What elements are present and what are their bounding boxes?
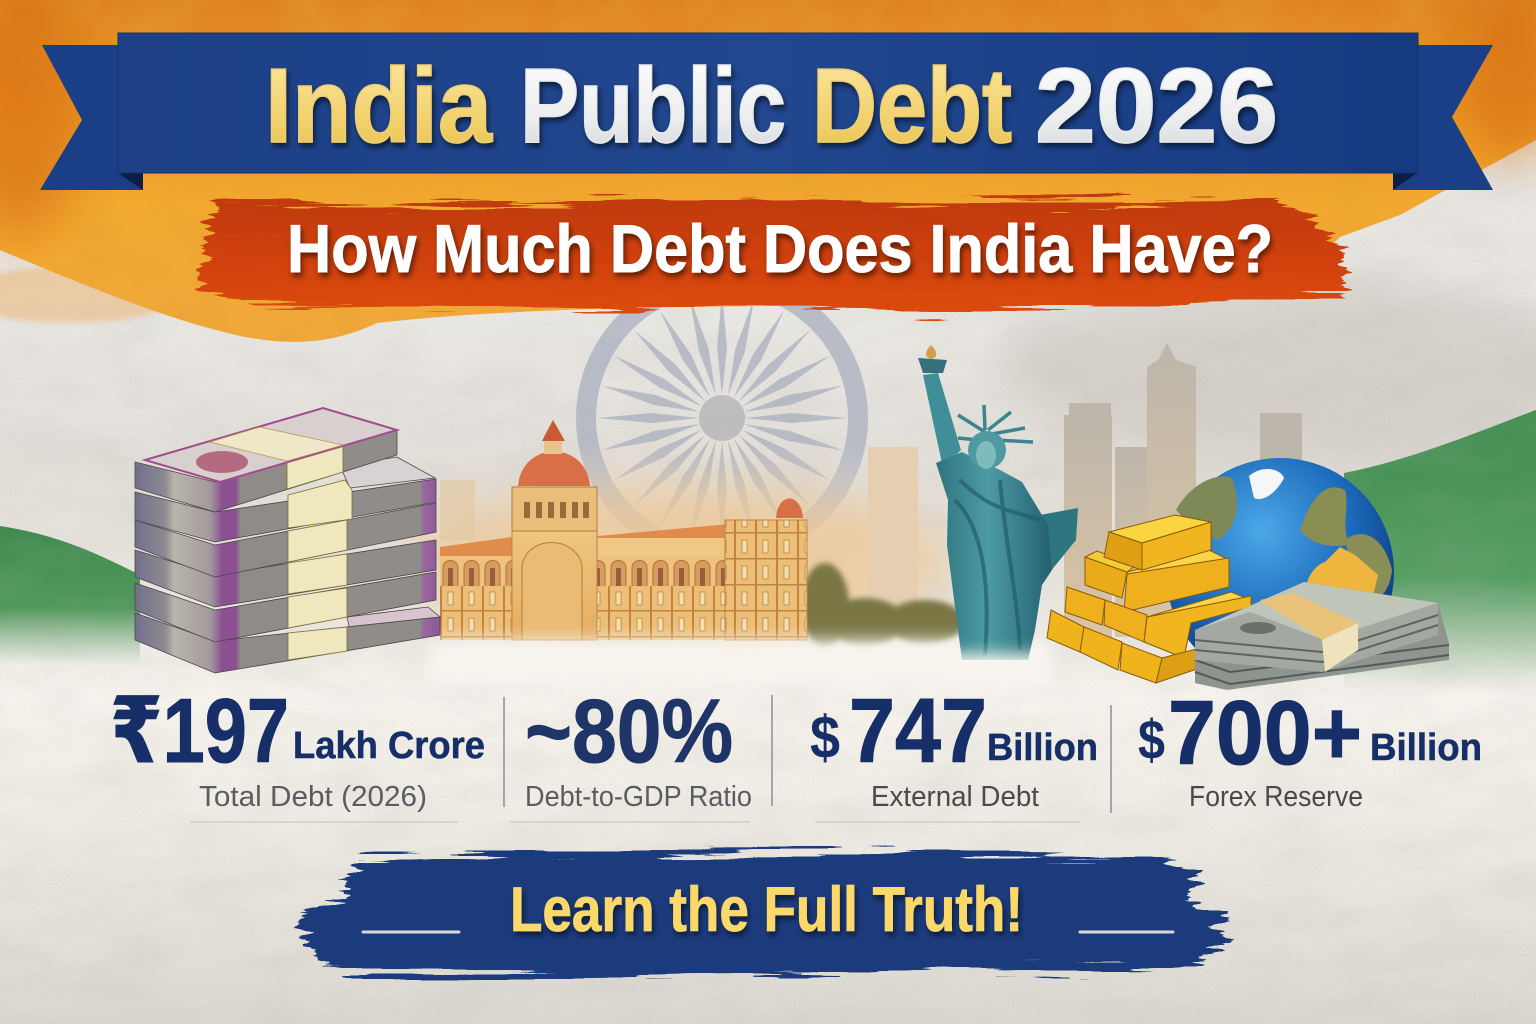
stat dividers <box>504 695 1111 813</box>
hotel central tower <box>512 530 597 640</box>
illustration: rupee note stacks <box>135 408 440 673</box>
rupee bundle 2 top note <box>340 457 435 488</box>
hotel upper window band <box>597 538 727 556</box>
stat: total debt <box>110 681 485 813</box>
illustration: dollar bundles <box>1195 547 1449 690</box>
background: green flag band left <box>0 526 140 670</box>
title: 2026 <box>1035 47 1278 165</box>
rupee bundle 4 band <box>288 554 347 594</box>
stat: external debt: External Debt <box>871 781 1039 813</box>
statue flame <box>926 345 936 359</box>
gold bar bottom end one <box>1047 610 1084 652</box>
statue robe <box>936 452 1052 660</box>
gold bar third row end one <box>1065 587 1105 625</box>
background: saffron flag band <box>0 0 1536 342</box>
illustration: city skyline <box>440 343 1302 645</box>
gold bar bottom end three <box>1120 643 1162 683</box>
statue torch arm <box>923 373 961 468</box>
title: Public <box>520 47 786 165</box>
globe Europe <box>1300 487 1350 546</box>
stat: total debt: ₹197 <box>110 681 289 782</box>
dollar upper stripes <box>1195 615 1438 662</box>
globe North America <box>1176 477 1237 540</box>
rupee bundle 2 <box>135 479 436 542</box>
rupee bundle 1 band side <box>287 445 343 489</box>
rupee bundle 5 band <box>288 588 347 628</box>
hotel drum <box>512 487 597 531</box>
dollar silhouette <box>1195 582 1449 690</box>
ribbon fold left <box>118 173 143 190</box>
rupee bundle 5 <box>135 572 436 642</box>
mist under statue <box>945 654 1045 680</box>
rupee bundle 3 band <box>288 520 347 562</box>
rupee bundle 1 side <box>135 430 397 512</box>
ribbon tail right <box>1393 45 1493 190</box>
dollar note seal <box>1240 622 1276 634</box>
top ribbon banner <box>40 33 1493 190</box>
gold bar bottom long <box>1156 648 1200 683</box>
illustration: globe <box>1170 458 1394 648</box>
hotel lantern <box>544 420 562 454</box>
hotel left wing roof <box>440 520 807 560</box>
illustration: trees beside hotel <box>801 563 965 647</box>
globe ocean <box>1170 458 1394 648</box>
stat: debt to GDP: ~80% <box>525 682 733 782</box>
statue head <box>968 431 1006 469</box>
stat: forex reserve: Billion <box>1370 727 1482 769</box>
stat: forex reserve: Forex Reserve <box>1189 781 1363 813</box>
hotel lantern cap <box>542 420 565 441</box>
hotel drum windows <box>524 502 589 518</box>
hotel windows row <box>440 586 807 640</box>
stat: external debt: $ <box>810 704 840 771</box>
statue drapery folds <box>955 480 1040 655</box>
rupee bundle 4 <box>135 540 436 607</box>
stat: external debt <box>810 681 1098 813</box>
subtitle: How Much Debt Does India Have? <box>287 211 1273 287</box>
gold bar third row end two <box>1104 600 1147 642</box>
statue torch platform <box>918 358 947 373</box>
stat: total debt: Total Debt (2026) <box>199 781 427 813</box>
Ashoka chakra watermark <box>576 305 868 524</box>
title: Debt <box>812 47 1012 165</box>
illustration: gold bars <box>1047 515 1251 683</box>
globe Greenland <box>1249 469 1284 499</box>
gold bar top <box>1109 515 1211 543</box>
dollar upper bundle top note <box>1195 582 1438 640</box>
statue tablet <box>1040 508 1078 572</box>
ribbon main <box>118 33 1418 173</box>
background: saffron mottling <box>132 0 1416 342</box>
background: deep orange right corner <box>1460 0 1536 160</box>
call-to-action text: Learn the Full Truth! <box>510 875 1023 945</box>
stat: forex reserve <box>1138 683 1482 813</box>
hotel main dome <box>518 452 590 486</box>
brush gap right <box>1080 930 1173 934</box>
rupee note ornament <box>196 451 248 473</box>
subtitle brush stroke <box>200 200 1345 310</box>
rupee bundle 6 <box>135 613 440 673</box>
mist under hotel <box>430 640 1050 684</box>
illustration: Taj Mahal Palace hotel <box>440 420 807 640</box>
stat: forex reserve: $ <box>1138 708 1165 771</box>
ribbon fold right <box>1393 173 1417 190</box>
hotel small dome <box>776 498 803 518</box>
rupee bundle 1 top note <box>145 408 397 482</box>
dollar lower stripes <box>1195 645 1449 684</box>
stat: total debt: Lakh Crore <box>293 725 485 767</box>
call-to-action brush stroke <box>300 853 1232 976</box>
title <box>265 47 1278 165</box>
stat: debt to GDP: Debt-to-GDP Ratio <box>525 781 752 813</box>
stat: forex reserve: 700+ <box>1168 683 1362 784</box>
statue crown spikes <box>958 405 1033 442</box>
hotel right tower <box>725 520 807 640</box>
rupee bundle 6 top note <box>347 607 440 630</box>
background: deep orange left corner <box>0 0 80 240</box>
rupee bundle 2 band <box>288 480 352 528</box>
ribbon tail left <box>40 45 143 190</box>
stat: external debt: Billion <box>987 727 1098 769</box>
gold bar second row cap <box>1085 551 1135 572</box>
rupee bundle 3 <box>135 503 436 577</box>
rupee bundle 6 band <box>288 627 347 660</box>
gold bar second row long <box>1127 550 1229 580</box>
rupee bundle 1 band top <box>210 427 343 461</box>
dollar band <box>1260 593 1358 640</box>
background: grey paper mottling upper right <box>1000 280 1536 460</box>
hotel entrance arch <box>522 542 582 640</box>
gold bar second row end <box>1085 557 1127 598</box>
gold bar third row long <box>1147 592 1251 630</box>
brush gap left <box>363 930 459 934</box>
dollar band front <box>1322 623 1358 672</box>
dollar upper bundle side <box>1195 603 1438 672</box>
globe Africa <box>1346 534 1392 594</box>
stat: external debt: 747 <box>849 681 987 782</box>
dollar fan ornament <box>1305 547 1378 600</box>
statue face <box>976 441 996 469</box>
gold bar bottom end two <box>1080 627 1122 670</box>
warm haze behind hotel <box>410 485 950 635</box>
illustration: Statue of Liberty <box>918 345 1078 660</box>
background: pale saffron fringe left <box>0 267 180 323</box>
background: green flag band right <box>1344 410 1536 690</box>
title: India <box>265 47 493 165</box>
hotel arches row <box>440 556 807 586</box>
